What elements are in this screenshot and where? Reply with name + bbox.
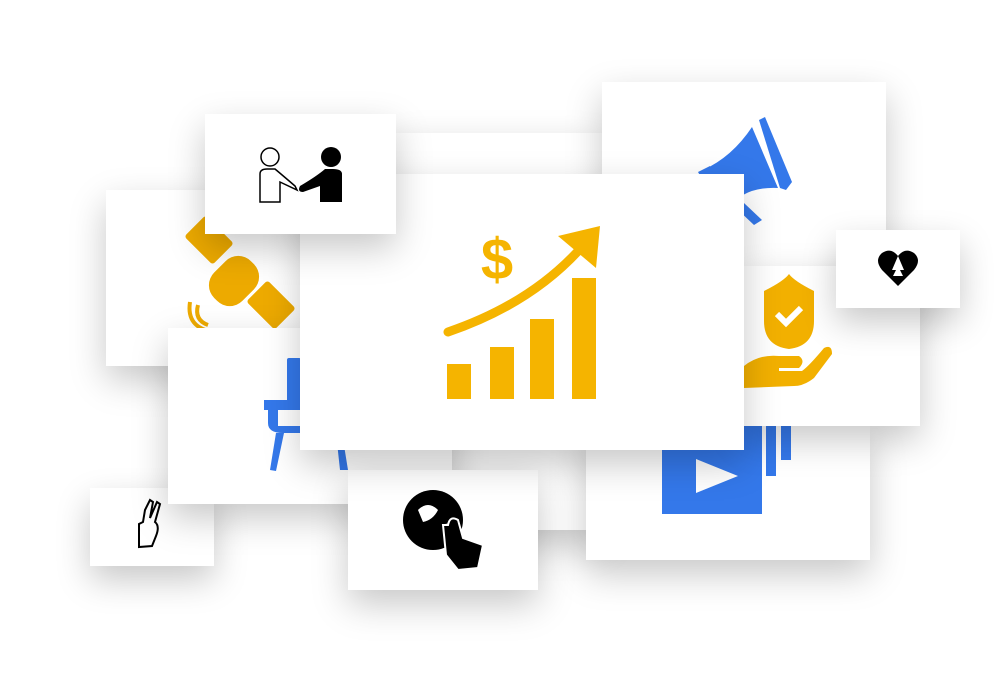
card: main growth chart — [300, 174, 744, 450]
card: heart — [836, 230, 960, 308]
card: back center — [396, 133, 602, 530]
icon: heart with tree — [878, 250, 918, 286]
icon: dollar growth chart — [444, 226, 600, 399]
icon: peace hand — [138, 498, 162, 548]
icon: hand with shield — [744, 274, 832, 388]
icon: dollar growth chart: $ — [481, 227, 513, 292]
icon: globe with pointer — [403, 490, 482, 569]
card: handshake — [205, 114, 396, 234]
card: shield — [744, 266, 920, 426]
card: megaphone — [602, 82, 886, 266]
card: video — [586, 426, 870, 560]
card: satellite — [106, 190, 300, 366]
card: peace — [90, 488, 214, 566]
icon: satellite — [186, 216, 294, 328]
card: globe — [348, 470, 538, 590]
icon: school chair — [264, 358, 348, 471]
icon: megaphone — [698, 117, 792, 225]
card: chair — [168, 328, 452, 504]
icon: video stack — [662, 426, 791, 514]
icon: handshake — [259, 147, 342, 203]
